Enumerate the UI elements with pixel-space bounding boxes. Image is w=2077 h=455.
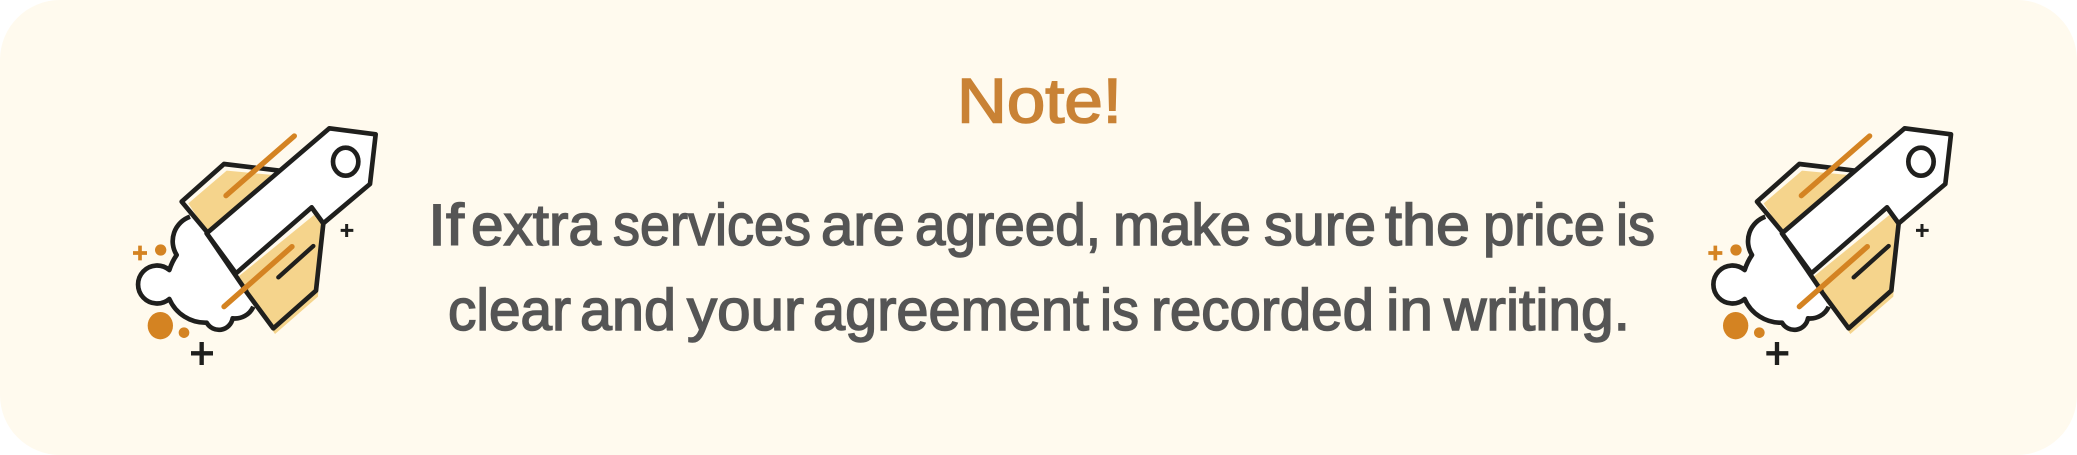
body text line 2: in — [1386, 278, 1433, 343]
rocket lower wing — [238, 207, 323, 334]
body text line 2 — [448, 278, 1630, 343]
rocket base line — [1782, 233, 1822, 292]
body text line 1: make — [1113, 193, 1251, 258]
title: Note! — [957, 66, 1122, 136]
body text line 2: recorded — [1151, 278, 1374, 343]
icon: right rocket — [1708, 128, 1951, 365]
body text line 1: sure — [1264, 193, 1376, 258]
body text line 1: is — [1616, 193, 1655, 258]
rocket upper wing — [182, 164, 280, 232]
rocket exhaust cloud — [1713, 217, 1829, 330]
body text line 2: and — [580, 278, 676, 343]
body text line 2: writing. — [1443, 278, 1630, 343]
rocket upper wing — [1757, 164, 1855, 232]
body text line 2: your — [687, 278, 804, 343]
orange and dark speed lines — [224, 136, 313, 307]
sparkles and dots — [133, 224, 353, 365]
body text line 1: agreed, — [915, 193, 1101, 258]
body text line 1: the — [1385, 193, 1470, 258]
rocket base line — [207, 233, 247, 292]
rocket exhaust cloud — [138, 217, 253, 330]
body text line 1: If — [428, 193, 465, 258]
body text line 1 — [428, 193, 1655, 258]
orange and dark speed lines — [1799, 136, 1889, 307]
rocket window — [1908, 148, 1934, 176]
sparkles and dots — [1708, 224, 1929, 365]
rocket lower wing — [1814, 207, 1899, 334]
rocket body — [207, 128, 376, 273]
body text line 2: is — [1100, 278, 1139, 343]
body text — [428, 193, 1655, 343]
rocket body — [1782, 128, 1951, 273]
body text line 1: extra — [471, 193, 602, 258]
body text line 1: price — [1483, 193, 1605, 258]
body text line 2: agreement — [813, 278, 1089, 343]
rocket window — [333, 148, 358, 176]
body text line 2: clear — [448, 278, 571, 343]
icon: left rocket — [133, 128, 376, 365]
body text line 1: services — [613, 193, 811, 258]
body text line 1: are — [821, 193, 905, 258]
